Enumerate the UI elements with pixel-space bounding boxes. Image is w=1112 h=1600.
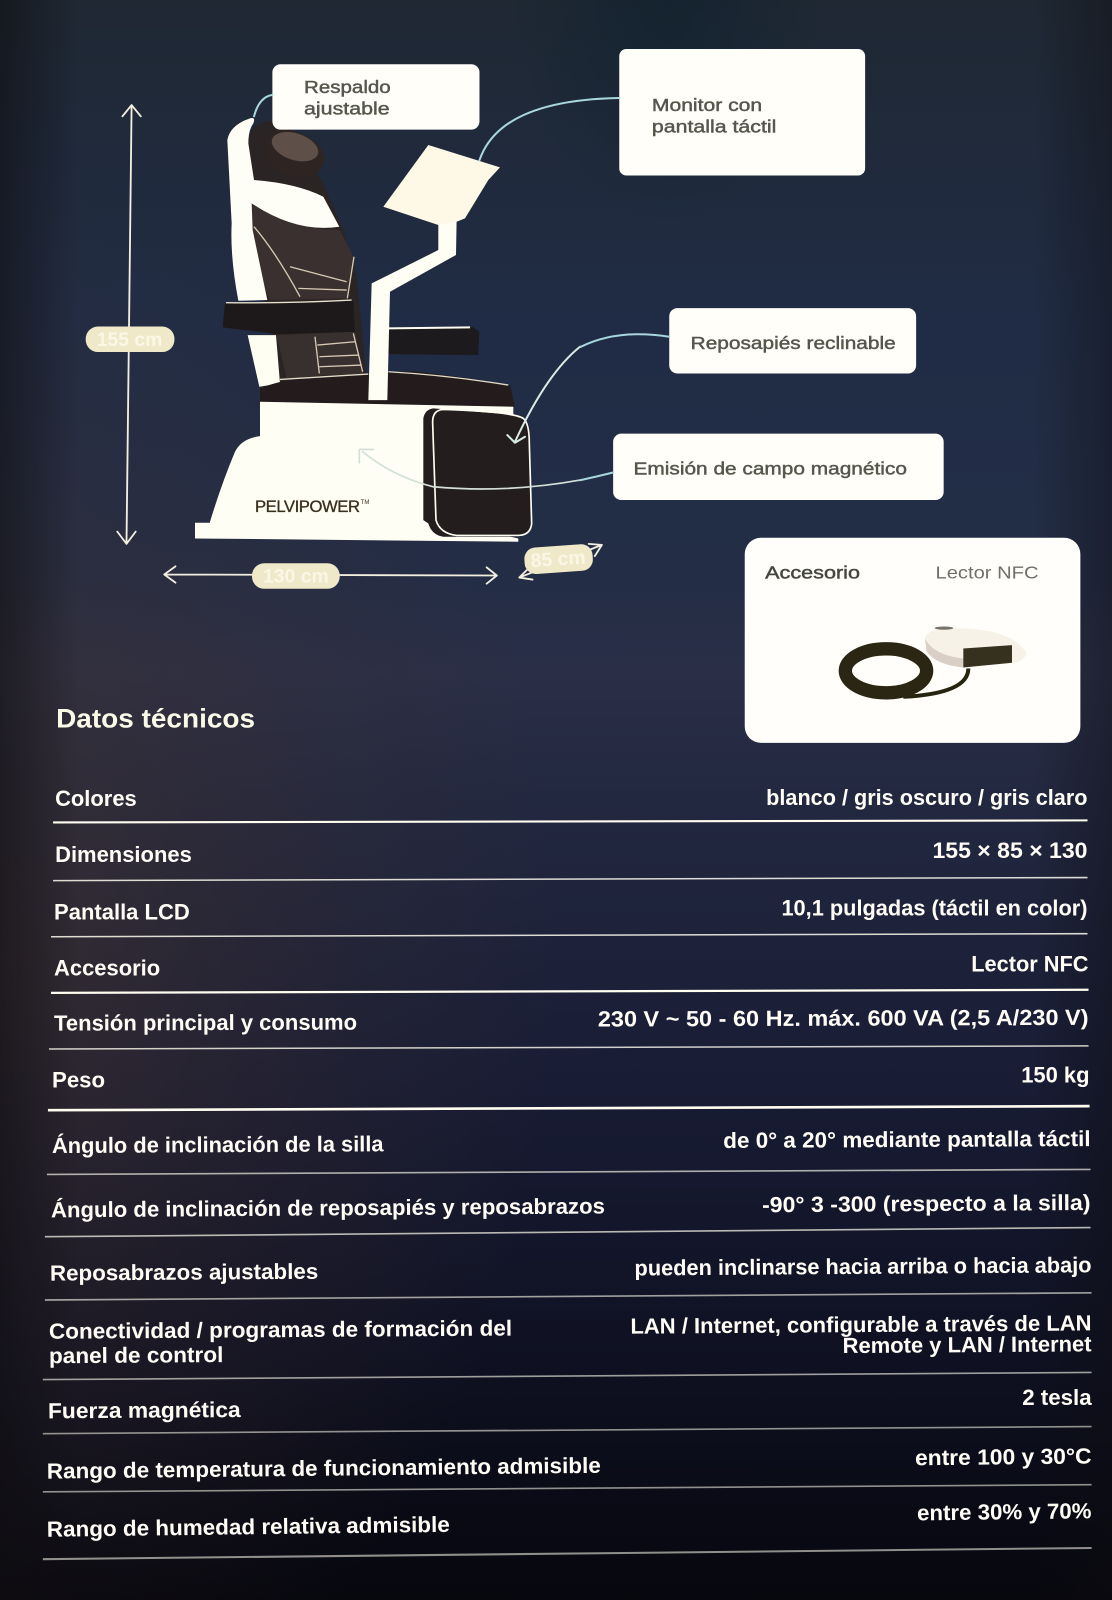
row: Dimensiones: Dimensiones [55,842,192,867]
headrest [268,130,325,177]
card: accessory [745,538,1080,743]
row: Accesorio: Accesorio [54,956,160,981]
row: Accesorio [54,951,1089,981]
row: Fuerza magnética [48,1385,1092,1423]
connector: magnetic label [580,472,613,480]
backrest upholstery [248,121,367,382]
footrest outline [433,409,532,535]
row: Rango de temperatura: Rango de temperatura de funcionamiento admisible [47,1453,601,1484]
chair base [210,402,513,530]
row: Fuerza magnética: 2 tesla [1022,1385,1092,1410]
seat cushion [260,371,515,407]
trademark: TM [361,500,369,506]
depth pill: 85 cm [530,546,586,572]
row: Ángulo silla: Ángulo de inclinación de la silla [52,1131,384,1158]
row: Pantalla LCD: 10,1 pulgadas (táctil en color) [781,895,1088,920]
row: Rango de temperatura [47,1443,1092,1484]
row: Peso: Peso [52,1068,105,1093]
width arrow [164,566,497,584]
white back shell [227,118,339,301]
row: Tensión: Tensión principal y consumo [54,1010,357,1036]
row: Peso [52,1063,1090,1093]
label: Respaldo ajustable: ajustable [304,98,390,118]
monitor support arm [368,218,457,400]
card: accessory: Lector NFC [936,563,1039,583]
connector: monitor [479,98,619,160]
row: Reposabrazos [50,1252,1092,1286]
table dividers [43,820,1092,1559]
row: Pantalla LCD [54,895,1088,924]
heading: Datos técnicos [56,704,255,734]
depth arrow [519,544,602,580]
row: Reposabrazos: Reposabrazos ajustables [50,1259,318,1286]
height pill: 155 cm [97,329,162,351]
icon: NFC reader [845,626,1027,697]
row: Fuerza magnética: Fuerza magnética [48,1397,242,1423]
row: Colores [55,785,1088,811]
row: Conectividad [49,1310,1092,1368]
row: Rango de temperatura: entre 100 y 30°C [915,1443,1092,1470]
row: Tensión [54,1005,1089,1036]
row: Reposabrazos: pueden inclinarse hacia arriba o hacia abajo [634,1252,1092,1281]
label: Emisión de campo magnético: Emisión de campo magnético [634,458,907,478]
label: Monitor con pantalla táctil: pantalla táctil [652,117,776,137]
row: Ángulo reposapiés: -90° 3 -300 (respecto a la silla) [762,1190,1091,1217]
connector: backrest [254,95,272,116]
connector: footrest [507,347,580,443]
row: Ángulo silla [52,1126,1091,1158]
upholstery seams [254,227,363,373]
label: Emisión de campo magnético [613,434,944,500]
row: Conectividad: LAN / Internet, configurable a través de LAN [630,1310,1092,1339]
row: Tensión: 230 V ~ 50 - 60 Hz. máx. 600 VA (2,5 A/230 V) [598,1005,1089,1032]
chair illustration [195,118,580,542]
label: Respaldo ajustable: Respaldo [304,77,391,97]
height arrow [117,105,141,544]
row: Rango de humedad [47,1498,1092,1542]
brand name: PELVIPOWER [255,497,360,516]
base plate [195,523,518,542]
row: Rango de humedad: entre 30% y 70% [917,1498,1092,1525]
connector: magnetic field [359,449,580,489]
backrest centre panel [252,205,353,300]
label: Respaldo ajustable [272,64,479,130]
row: Dimensiones [55,838,1088,867]
lower back panel [277,332,363,378]
width pill [252,563,340,589]
connector: footrest label [580,334,669,347]
depth pill [524,544,594,575]
row: Conectividad: Remote y LAN / Internet [843,1331,1092,1358]
row: Dimensiones: 155 × 85 × 130 [932,838,1088,863]
row: Conectividad: panel de control [49,1342,223,1368]
row: Peso: 150 kg [1021,1063,1090,1088]
row: Ángulo reposapiés: Ángulo de inclinación de reposapiés y reposabrazos [51,1193,605,1222]
right armrest [388,327,479,355]
row: Ángulo reposapiés [51,1190,1091,1222]
label: Monitor con pantalla táctil: Monitor con [652,95,762,115]
footrest cushion [423,408,532,537]
label: Reposapiés reclinable [669,308,916,373]
row: Conectividad: Conectividad / programas de formación del [49,1316,512,1344]
row: Accesorio: Lector NFC [971,951,1089,976]
touch screen [383,145,500,225]
label: Reposapiés reclinable: Reposapiés reclinable [691,333,896,353]
row: Ángulo silla: de 0° a 20° mediante pantalla táctil [723,1126,1091,1153]
width pill: 130 cm [263,566,329,588]
lower shell [248,335,280,387]
row: Colores: Colores [55,786,137,811]
row: Pantalla LCD: Pantalla LCD [54,899,190,924]
row: Colores: blanco / gris oscuro / gris claro [766,785,1088,810]
left armrest [223,301,355,334]
card: accessory: Accesorio [765,563,860,583]
height pill [86,327,174,352]
row: Rango de humedad: Rango de humedad relativa admisible [47,1512,450,1542]
label: Monitor con pantalla táctil [619,49,865,176]
